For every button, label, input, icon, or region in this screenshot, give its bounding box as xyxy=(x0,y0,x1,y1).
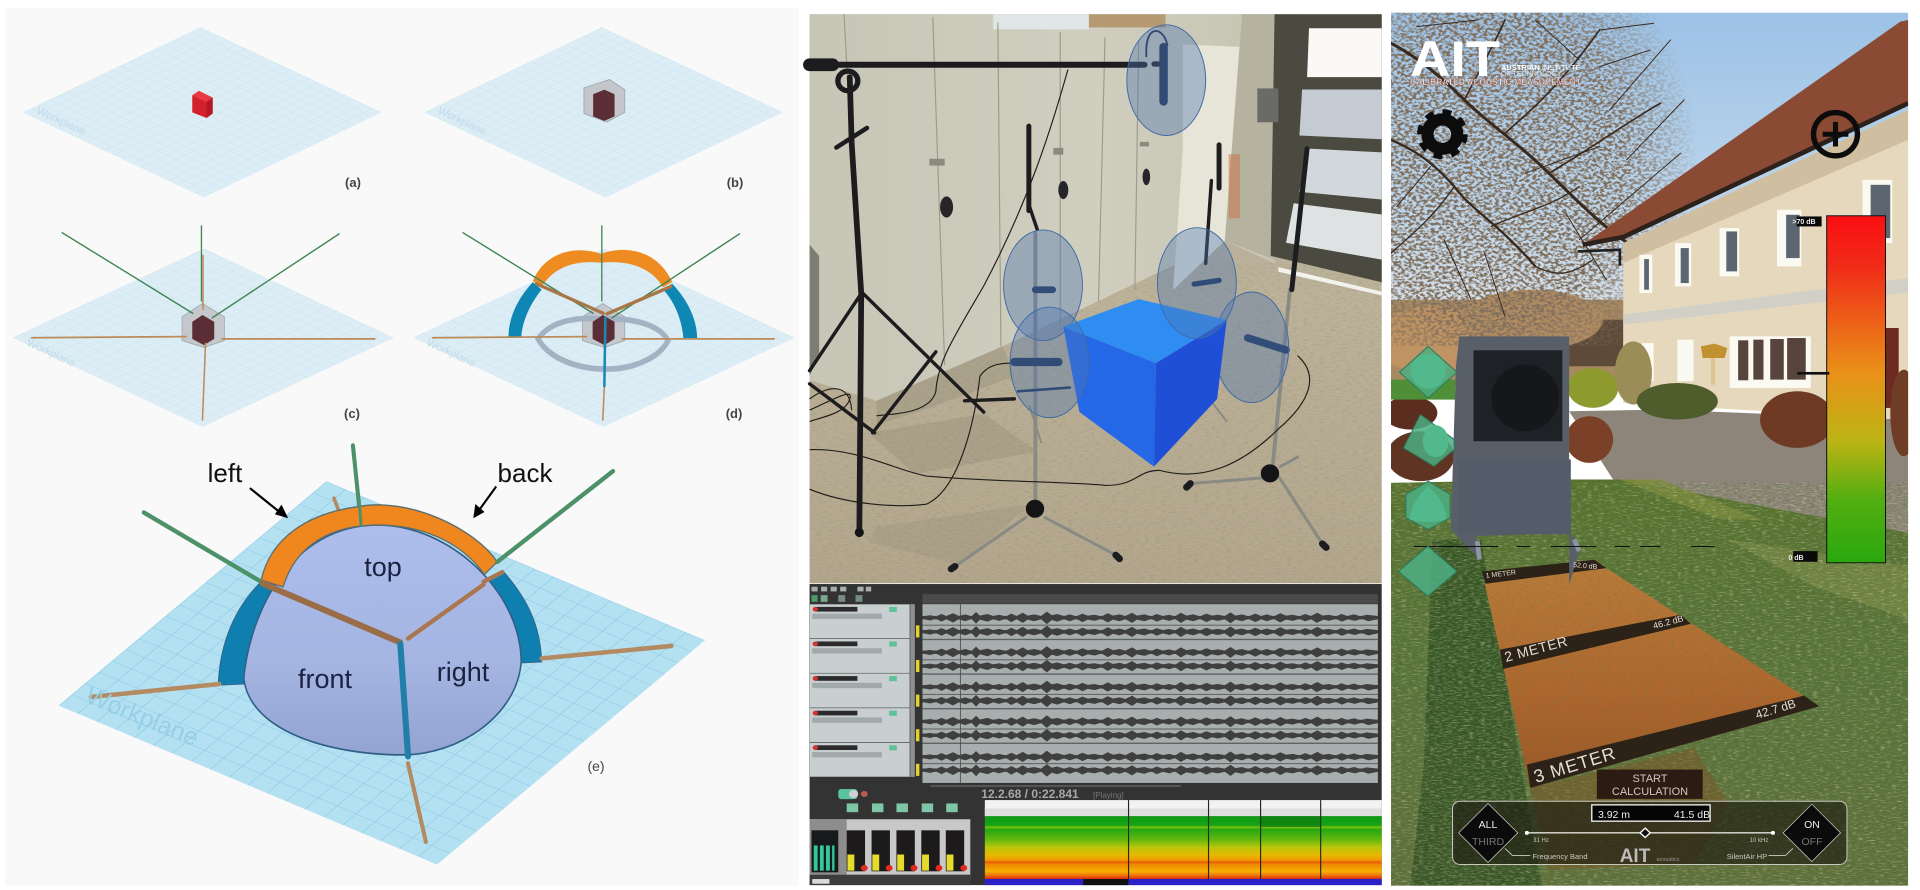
microphone stands xyxy=(855,126,1326,569)
AIT logo: OF TECHNOLOGY xyxy=(1501,71,1562,78)
hemisphere labels: back xyxy=(498,458,553,488)
hemisphere labels xyxy=(208,458,553,694)
panel button and slider labels: OFF xyxy=(1802,836,1822,848)
speaker unit xyxy=(1451,336,1581,584)
workplane watermarks: Workplane xyxy=(35,105,87,138)
AIT logo: AUSTRIAN INSTITUTE xyxy=(1501,63,1581,72)
hemisphere labels: front xyxy=(298,664,353,694)
workplane watermarks: Workplane xyxy=(436,105,488,138)
panel button and slider labels: AIT xyxy=(1620,846,1651,867)
AIT logo xyxy=(1410,31,1581,87)
distance labels: 3 METER xyxy=(1531,743,1618,787)
meter labels: >70 dB xyxy=(1792,219,1816,226)
waveform tracks xyxy=(922,604,1378,783)
road and bushes xyxy=(1383,341,1917,533)
workplane watermarks: Workplane xyxy=(425,337,477,370)
meter labels: 0 dB xyxy=(1788,555,1804,562)
AIT logo: CALIBRATED ACOUSTIC MEASUREMENT xyxy=(1410,77,1581,87)
AIT logo: AIT xyxy=(1410,31,1500,87)
meter labels xyxy=(1788,219,1816,562)
panel button and slider labels: 10 kHz xyxy=(1750,838,1768,844)
photo background: floor, cabinets and garage door xyxy=(810,14,1382,583)
tripod and boom arm xyxy=(810,31,1167,534)
sky xyxy=(1391,12,1908,300)
distance labels: 52.0 dB xyxy=(1573,562,1598,571)
sub-figure captions: (a) xyxy=(345,175,361,190)
distance labels: 1 METER xyxy=(1485,569,1516,580)
level indicator tick xyxy=(1797,372,1829,375)
sub-figure captions: (c) xyxy=(344,406,360,421)
panel button and slider labels: Frequency Band xyxy=(1532,852,1588,861)
panel button and slider labels: 31 Hz xyxy=(1533,838,1549,844)
farmhouse xyxy=(1578,20,1908,420)
control panel xyxy=(1453,801,1847,864)
hemisphere labels: left xyxy=(208,458,243,488)
readout box xyxy=(1592,805,1710,821)
panel: microphone array photo xyxy=(810,14,1382,583)
spectrogram windows xyxy=(985,800,1382,885)
distance labels: 42.7 dB xyxy=(1754,696,1797,722)
panel: augmented reality outdoor view xyxy=(1373,13,1917,886)
track headers xyxy=(810,604,919,777)
start calculation button xyxy=(1597,770,1703,799)
workplane (a) with red cube xyxy=(23,27,381,198)
green selection buttons xyxy=(1398,346,1457,596)
start calculation label xyxy=(1612,773,1688,798)
hemisphere labels: top xyxy=(364,552,402,582)
workplane (e) with measuring hemisphere xyxy=(59,446,705,864)
panel button and slider labels: ON xyxy=(1804,819,1820,831)
hemisphere labels: right xyxy=(437,657,490,687)
readout values: 3.92 m xyxy=(1598,809,1630,821)
tree branches xyxy=(1391,13,1695,346)
panel button and slider labels: THIRD xyxy=(1472,836,1504,848)
start calculation label: START xyxy=(1632,773,1668,785)
orange sound level carpet xyxy=(1481,566,1823,869)
distance labels: 2 METER xyxy=(1503,633,1569,665)
panel button and slider labels: ALL xyxy=(1479,819,1497,831)
sub-figure captions: (d) xyxy=(726,406,742,421)
workplane watermarks: Workplane xyxy=(82,682,203,752)
arrow: left label xyxy=(250,488,288,518)
level meter bar xyxy=(1827,216,1886,563)
transport time readout: 12.2.68 / 0:22.841 xyxy=(981,787,1079,801)
transport status: [Playing] xyxy=(1093,791,1124,800)
toolbar icons xyxy=(811,587,871,602)
mode diamonds xyxy=(1459,804,1841,862)
panel button and slider labels: SilentAir HP xyxy=(1727,852,1767,861)
AR distance bands xyxy=(1482,560,1819,788)
transport bar xyxy=(838,785,1181,799)
sub-figure captions: (b) xyxy=(727,175,743,190)
sub-figure captions xyxy=(344,175,743,774)
add button icon xyxy=(1814,113,1857,156)
workplane (b) with cube inside bounding box xyxy=(424,27,783,198)
lawn xyxy=(1391,480,1908,886)
arrow: back label xyxy=(473,486,496,518)
microphone cables xyxy=(810,70,1310,506)
workplane watermarks xyxy=(25,105,488,752)
start calculation label: CALCULATION xyxy=(1612,786,1688,798)
distance labels xyxy=(1485,562,1797,787)
blue measurement discs and source cube xyxy=(1004,25,1289,467)
panel: audio workstation screenshot xyxy=(810,584,1382,885)
distance labels: 46.2 dB xyxy=(1652,613,1684,631)
sub-figure captions: (e) xyxy=(587,758,605,774)
settings gear icon xyxy=(1420,112,1465,156)
dashed ground line xyxy=(1414,546,1714,547)
workplane watermarks: Workplane xyxy=(25,337,77,370)
workplane (d) with arcs xyxy=(413,226,795,427)
background hedge and trees xyxy=(1373,290,1624,386)
workplane (c) with crossing rods xyxy=(13,226,394,427)
panel button and slider labels: acoustics xyxy=(1657,857,1680,863)
meter labels background xyxy=(1793,216,1822,562)
timeline ruler xyxy=(922,594,1378,604)
readout values xyxy=(1598,809,1710,821)
readout values: 41.5 dB xyxy=(1674,809,1710,821)
panel leader lines xyxy=(1505,848,1793,855)
panel: workplane construction diagrams xyxy=(5,8,799,886)
mixer channels xyxy=(810,803,970,885)
frequency slider xyxy=(1525,828,1775,837)
panel button and slider labels xyxy=(1472,819,1822,867)
